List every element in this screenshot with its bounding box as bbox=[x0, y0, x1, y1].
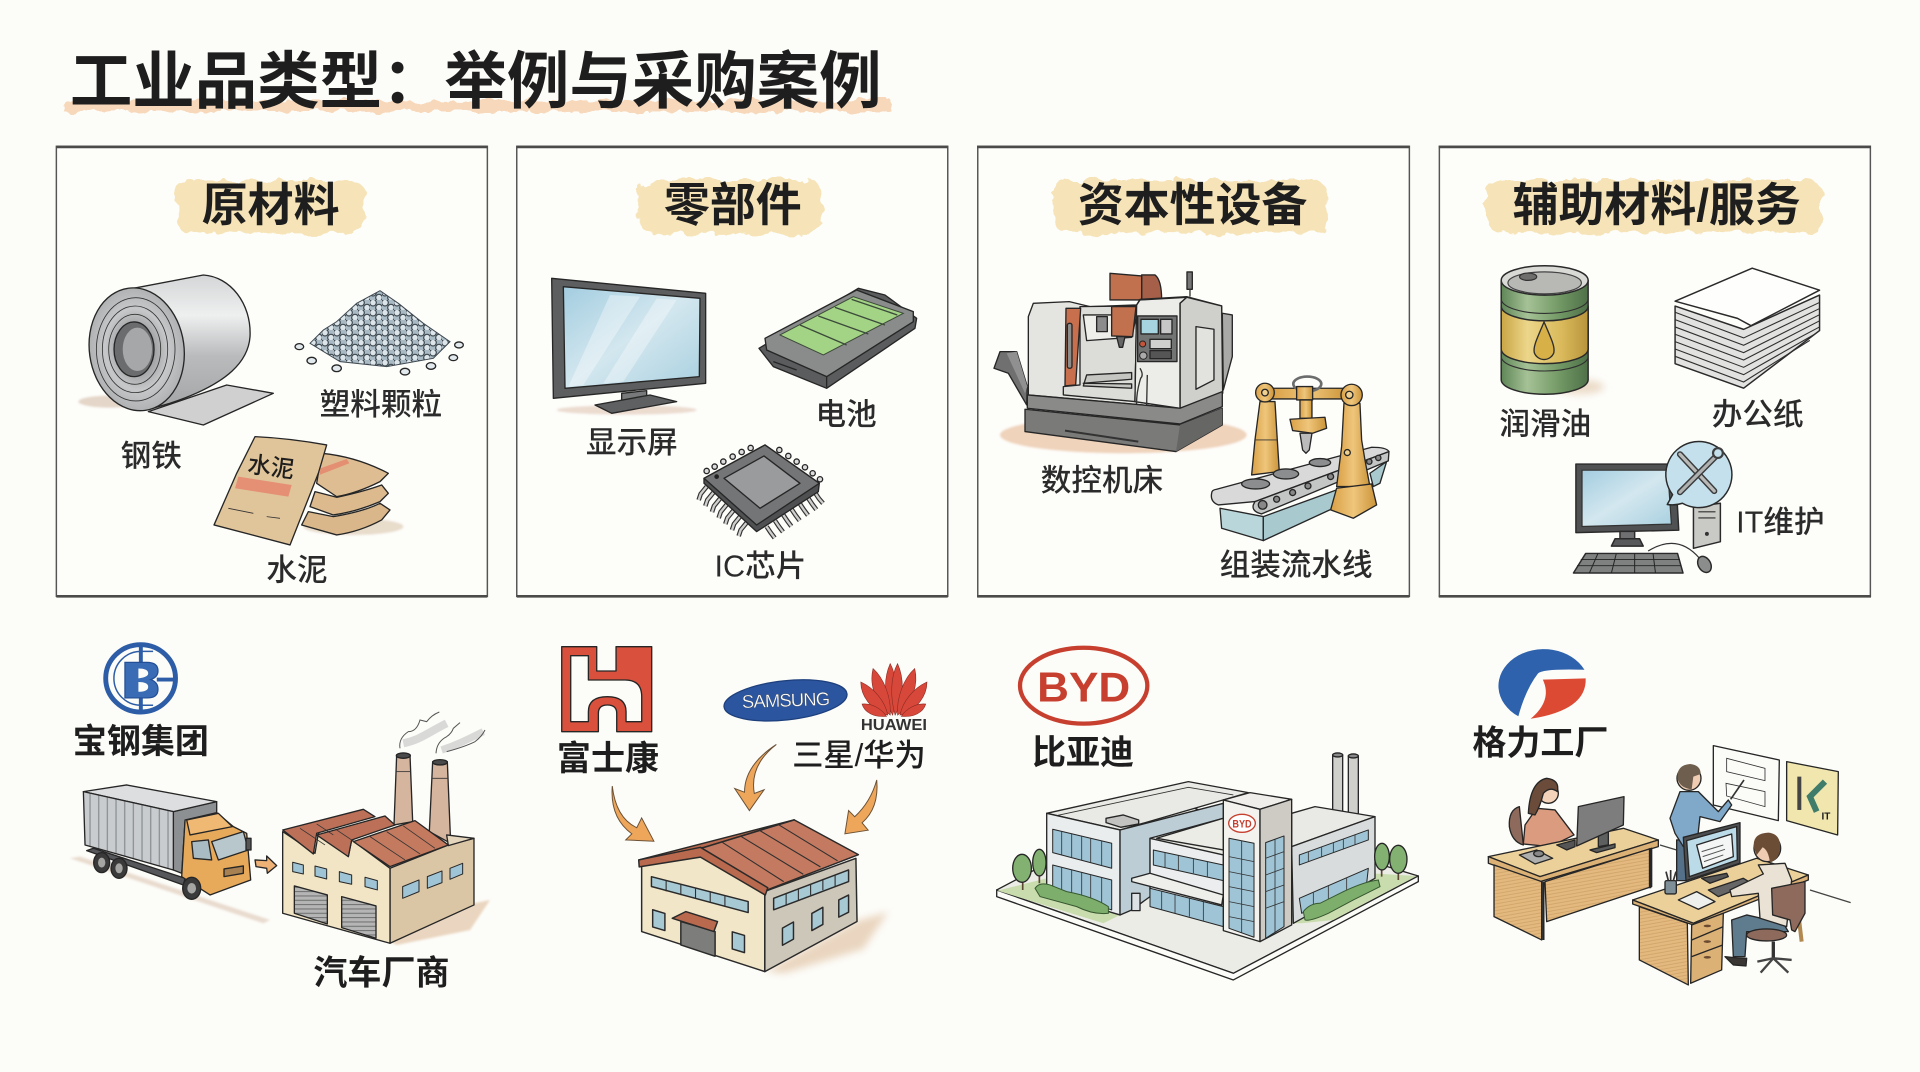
company name: 宝钢集团: 宝钢集团 bbox=[73, 723, 209, 761]
icon: plastic pellets bbox=[295, 291, 463, 375]
icon: steel coil bbox=[78, 275, 273, 425]
label: 数控机床: 数控机床 bbox=[1041, 464, 1163, 498]
title: 工业品类型：举例与采购案例 bbox=[70, 47, 882, 117]
icon: oil drum bbox=[1501, 266, 1604, 394]
panel: 辅助材料/服务 bbox=[1439, 146, 1871, 596]
label: IC芯片: IC芯片 bbox=[714, 550, 806, 584]
label: 汽车厂商: 汽车厂商 bbox=[313, 954, 449, 992]
panel: 资本性设备 bbox=[977, 146, 1409, 596]
company name: 富士康: 富士康 bbox=[557, 740, 659, 778]
logo: Samsung bbox=[722, 674, 849, 726]
icon: battery bbox=[759, 288, 917, 388]
heading: 零部件: 零部件 bbox=[664, 179, 802, 231]
case: 宝钢集团 bbox=[70, 645, 490, 992]
icon: office scene bbox=[1488, 746, 1851, 985]
label: 组装流水线: 组装流水线 bbox=[1220, 548, 1373, 582]
logo: BYD: BYD bbox=[1037, 664, 1130, 711]
label: 钢铁: 钢铁 bbox=[121, 440, 182, 474]
label: 水泥: 水泥 bbox=[266, 553, 328, 587]
logo: Foxconn bbox=[562, 647, 652, 732]
arrow: 华为 to factory bbox=[845, 780, 877, 834]
label: 润滑油: 润滑油 bbox=[1499, 408, 1591, 442]
label: 塑料颗粒: 塑料颗粒 bbox=[320, 388, 442, 422]
icon: computer with tools bbox=[1573, 442, 1732, 575]
label: 显示屏: 显示屏 bbox=[586, 426, 678, 460]
company name: 格力工厂: 格力工厂 bbox=[1472, 724, 1608, 762]
icon: CNC machine bbox=[994, 272, 1247, 453]
heading: 原材料: 原材料 bbox=[202, 179, 340, 231]
icon: factory bbox=[283, 712, 490, 945]
arrow: truck to factory bbox=[255, 856, 277, 873]
label: 办公纸: 办公纸 bbox=[1712, 398, 1804, 432]
arrow: 富士康 to factory bbox=[612, 786, 654, 841]
company name: 比亚迪: 比亚迪 bbox=[1032, 734, 1134, 772]
logo: Huawei bbox=[861, 664, 927, 734]
icon: IC chip bbox=[699, 445, 823, 538]
case: 比亚迪 bbox=[997, 648, 1418, 980]
logo: Gree bbox=[1498, 649, 1586, 719]
logo: Samsung: SAMSUNG bbox=[742, 688, 830, 712]
icon: truck bbox=[70, 785, 270, 923]
label: 电池: 电池 bbox=[816, 398, 877, 432]
icon: BYD building: BYD bbox=[1232, 818, 1252, 830]
company name: 三星/华为: 三星/华为 bbox=[792, 738, 926, 773]
icon: cement bags: 水泥 bbox=[246, 451, 296, 483]
icon: assembly plant bbox=[639, 820, 888, 973]
icon: display bbox=[552, 278, 706, 415]
arrow: 三星 to factory bbox=[735, 744, 776, 811]
panel: 原材料 bbox=[56, 146, 487, 596]
heading: 辅助材料/服务: 辅助材料/服务 bbox=[1513, 179, 1801, 231]
logo: BYD bbox=[1020, 648, 1147, 724]
icon: cement bags bbox=[214, 437, 403, 545]
heading: 资本性设备: 资本性设备 bbox=[1078, 179, 1307, 231]
case: 格力工厂 bbox=[1472, 649, 1851, 985]
icon: office scene: IT bbox=[1822, 811, 1830, 822]
logo: Baosteel bbox=[106, 645, 176, 712]
icon: BYD building bbox=[997, 753, 1418, 980]
panel: 零部件 bbox=[517, 146, 948, 596]
icon: paper stack bbox=[1675, 268, 1820, 388]
logo: Huawei: HUAWEI bbox=[861, 717, 927, 734]
case: 富士康 / 三星 / 华为 bbox=[557, 647, 927, 973]
label: IT维护: IT维护 bbox=[1736, 506, 1825, 540]
icon: assembly line robot bbox=[1211, 377, 1389, 541]
heading: 原材料 bbox=[176, 179, 365, 234]
